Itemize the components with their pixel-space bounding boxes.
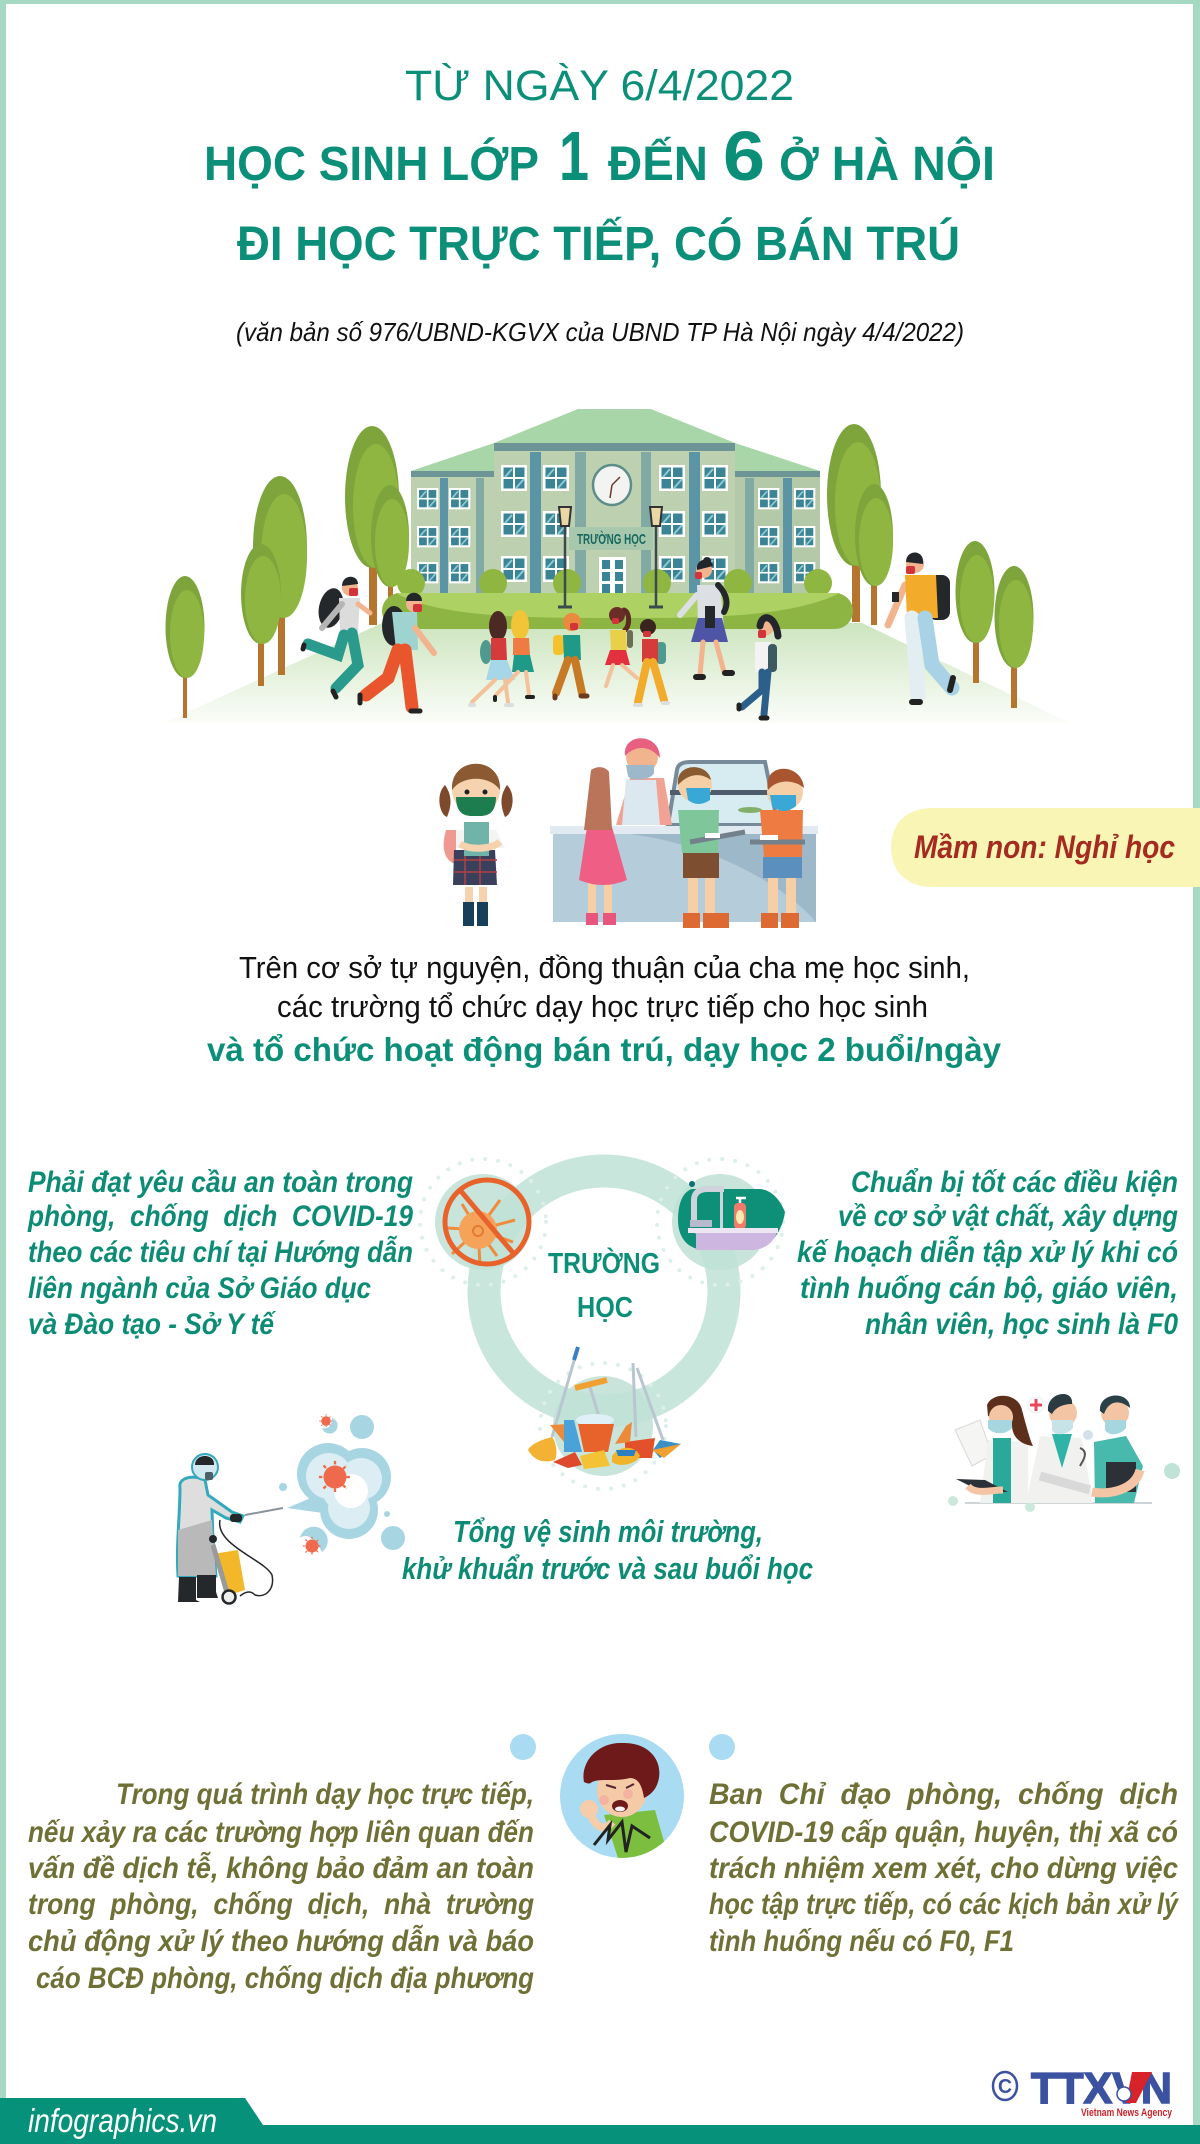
canteen server [616, 738, 672, 825]
logo: TTXVN: C [998, 2076, 1012, 2098]
requirement text right [797, 1166, 1178, 1341]
decorative dot right [709, 1734, 735, 1760]
person: student orange pants [360, 593, 434, 711]
icon: sink [657, 1159, 785, 1285]
bottom text right: Ban Chỉ đạo phòng, chống dịch [709, 1778, 1178, 1811]
clock [593, 465, 631, 505]
citation: (văn bản số 976/UBND-KGVX của UBND TP Hà Nội ngày 4/4/2022) [236, 317, 964, 347]
doctors illustration [948, 1394, 1180, 1512]
title: line 2: ĐI HỌC TRỰC TIẾP, CÓ BÁN TRÚ [237, 216, 960, 271]
school ring diagram [420, 1159, 785, 1489]
trees [166, 424, 1034, 718]
door [599, 557, 626, 593]
icon: no virus [420, 1159, 546, 1285]
boy orange shirt [750, 769, 805, 928]
requirement text left: phòng, chống dịch COVID-19 [27, 1200, 413, 1233]
sanitation text: Tổng vệ sinh môi trường, [453, 1514, 763, 1549]
hedge lawn [382, 593, 853, 629]
teacher [680, 557, 732, 677]
bottom text right: tình huống nếu có F0, F1 [709, 1925, 1014, 1958]
title: line 1: ĐẾN [608, 137, 708, 191]
girl with book [439, 764, 513, 926]
doctor: nurse in scrubs [1092, 1396, 1143, 1503]
intro paragraph [207, 950, 1002, 1068]
canteen illustration [439, 738, 818, 928]
child 4 [605, 607, 637, 686]
spray wand and hose [245, 1508, 283, 1515]
logo: TTXVN: TTXVN [1031, 2064, 1172, 2113]
child 5 [635, 619, 668, 705]
decorative dot left [510, 1734, 536, 1760]
ring [484, 1171, 724, 1411]
logo: TTXVN [993, 2064, 1173, 2119]
requirement text left: theo các tiêu chí tại Hướng dẫn [28, 1235, 413, 1269]
person: running man [303, 577, 370, 697]
school scene illustration [164, 409, 1070, 723]
footer band: infographics.vn [28, 2102, 217, 2139]
intro paragraph: và tổ chức hoạt động bán trú, dạy học 2 buổi/ngày [207, 1031, 1002, 1068]
title: line 1 [204, 117, 995, 195]
center label: TRƯỜNG [548, 1246, 660, 1280]
center label [548, 1246, 660, 1324]
bottom text left: nếu xảy ra các trường hợp liên quan đến [28, 1816, 534, 1849]
school sign: TRƯỜNG HỌC [577, 530, 646, 548]
sanitation text: khử khuẩn trước và sau buổi học [402, 1551, 813, 1586]
logo: TTXVN: Vietnam News Agency [1081, 2107, 1173, 2119]
bottom text left: vấn đề dịch tễ, không bảo đảm an toàn [28, 1851, 534, 1885]
title: line 1: 1 [559, 117, 589, 195]
pink dress girl [579, 767, 627, 925]
title [204, 62, 995, 271]
center label: HỌC [577, 1292, 633, 1324]
school building [411, 409, 820, 593]
icon: coughing boy [560, 1734, 684, 1858]
child 1 [470, 611, 515, 705]
title: date line: TỪ NGÀY 6/4/2022 [405, 62, 794, 110]
bottom text left: Trong quá trình dạy học trực tiếp, [116, 1778, 534, 1811]
ground path [164, 623, 1070, 723]
title: line 1: Ở HÀ NỘI [779, 136, 995, 191]
school sign [569, 527, 653, 550]
street lamps [558, 507, 663, 607]
doctor: woman with clipboard [955, 1396, 1033, 1503]
serving counter [550, 826, 818, 922]
title: line 1: 6 [723, 117, 765, 195]
bottom text left: trong phòng, chống dịch, nhà trường [28, 1888, 534, 1921]
bottom text left: chủ động xử lý theo hướng dẫn và báo [28, 1924, 534, 1958]
sanitation text [402, 1514, 813, 1586]
requirement text left: liên ngành của Sở Giáo dục [28, 1272, 371, 1305]
disinfection worker illustration [177, 1414, 405, 1604]
requirement text left [27, 1166, 413, 1341]
child 2 [495, 610, 534, 700]
child 6 [739, 618, 778, 718]
footer band [0, 2098, 1200, 2144]
intro paragraph: các trường tổ chức dạy học trực tiếp cho học sinh [277, 989, 928, 1024]
requirement text left: và Đào tạo - Sở Y tế [28, 1308, 277, 1341]
boy green shirt [678, 767, 745, 928]
intro paragraph: Trên cơ sở tự nguyện, đồng thuận của cha mẹ học sinh, [239, 950, 970, 985]
callout: preschool closed [891, 808, 1200, 887]
doctor: man with stethoscope [1026, 1394, 1093, 1503]
bottom text left [28, 1778, 534, 1995]
bushes [397, 569, 832, 597]
bottom text left: cáo BCĐ phòng, chống dịch địa phương [36, 1962, 534, 1995]
child 3 [553, 613, 587, 698]
yellow tank [213, 1550, 245, 1596]
spray cloud [279, 1414, 405, 1555]
man with phone [888, 552, 953, 702]
people walking to school [303, 552, 953, 718]
glass food case [668, 762, 778, 825]
worker in protective suit [177, 1454, 243, 1604]
icon: cleaning tools [528, 1347, 681, 1489]
title: line 1: HỌC SINH LỚP [204, 136, 539, 191]
bottom text right [709, 1778, 1179, 1958]
requirement text left: Phải đạt yêu cầu an toàn trong [28, 1166, 413, 1199]
